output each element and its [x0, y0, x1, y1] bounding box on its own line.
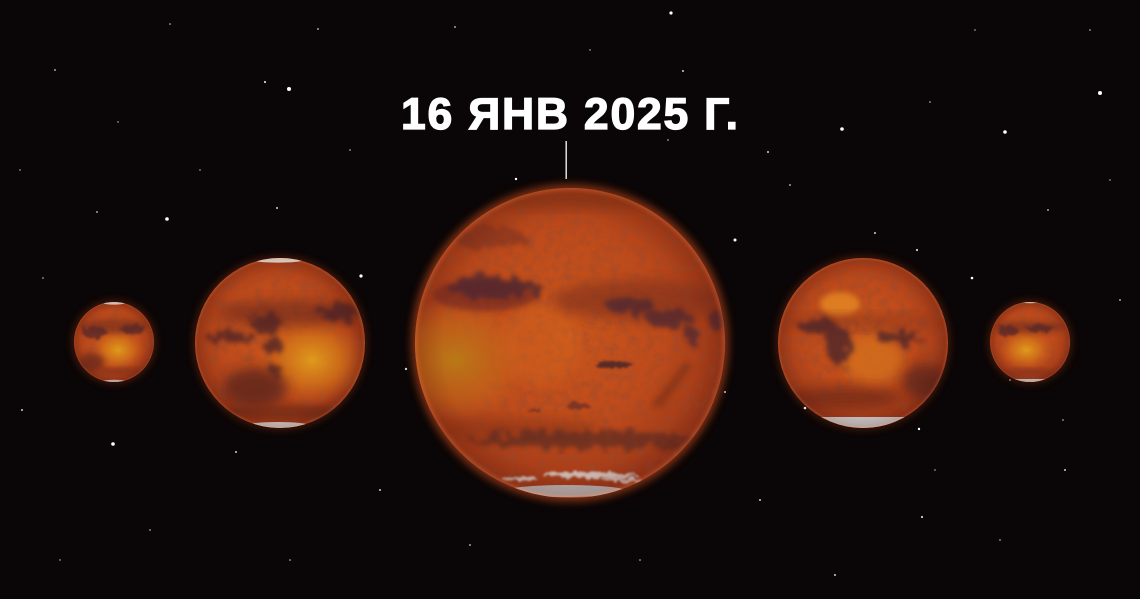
planet: right medium Mars: [776, 256, 950, 431]
planet: left medium Mars: [193, 256, 368, 430]
planet: far left small Mars: [72, 300, 156, 384]
planet: far right small Mars: [988, 300, 1072, 384]
planet: central large Mars: [383, 184, 729, 502]
title: 16 ЯНВ 2025 Г.: [401, 90, 738, 139]
pointer line: [566, 141, 567, 179]
